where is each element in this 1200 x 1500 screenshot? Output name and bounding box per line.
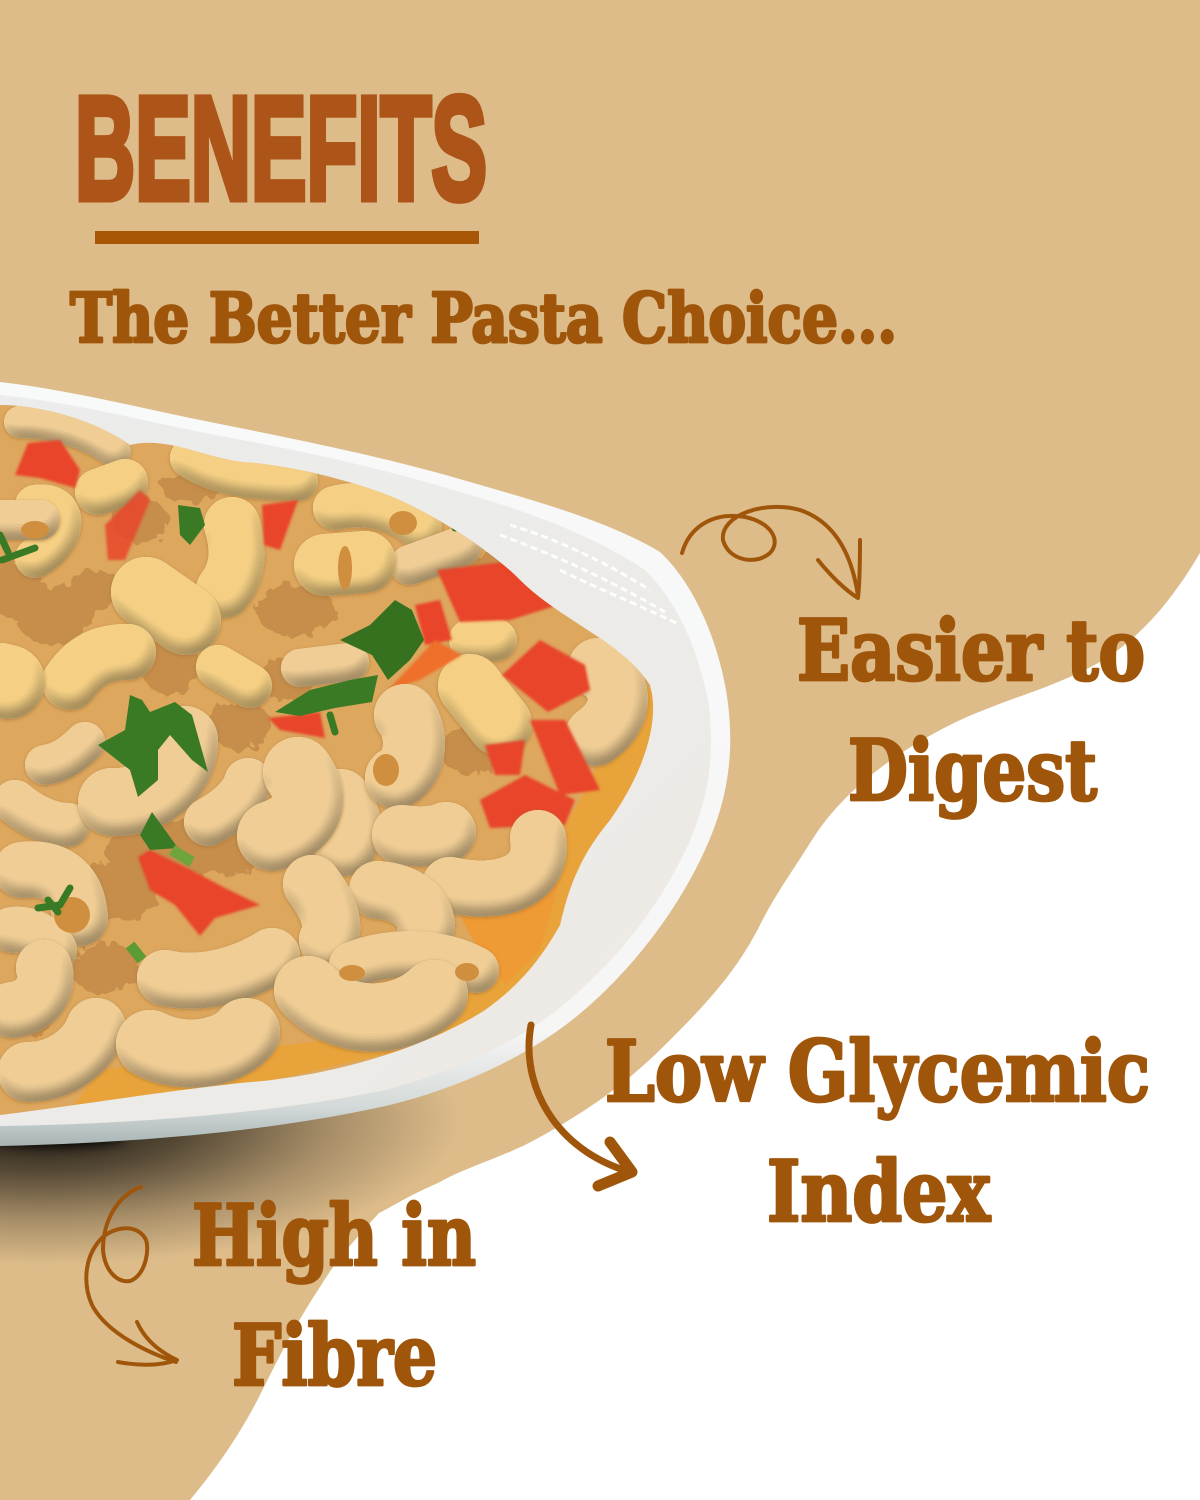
subtitle: The Better Pasta Choice... [70,279,897,359]
parsley [0,505,473,960]
pasta holes back [21,511,417,590]
plate inner bowl [0,395,711,1126]
background: white wave [190,553,1200,1500]
label: High in Fibre [192,1186,476,1405]
red pepper [138,850,260,936]
label: Easier to Digest: Easier to [797,601,1145,700]
label: Low Glycemic Index: Low Glycemic [605,1022,1150,1121]
label: Low Glycemic Index [605,1022,1150,1241]
plate glare [500,525,680,625]
arrow: to Easier to Digest [682,507,860,598]
pasta holes front [54,754,479,981]
label: Easier to Digest: Digest [848,721,1097,820]
label: Easier to Digest [797,601,1145,820]
tomatoes back [15,440,600,828]
plate rim [0,382,730,1146]
label: Low Glycemic Index: Index [767,1142,991,1241]
title underline [95,231,479,244]
arrow: to High in Fibre [86,1187,177,1365]
macaroni front layer [12,715,539,1072]
plate [0,382,730,1146]
label: High in Fibre: Fibre [232,1306,437,1405]
plate shadow [0,975,460,1265]
food base and sauce [0,390,700,1130]
arrow: to Low Glycemic Index [529,1025,632,1186]
title: BENEFITS: BENEFITS [75,67,487,231]
macaroni back layer [0,422,618,845]
label: High in Fibre: High in [192,1186,476,1285]
ground meat [0,474,520,1036]
